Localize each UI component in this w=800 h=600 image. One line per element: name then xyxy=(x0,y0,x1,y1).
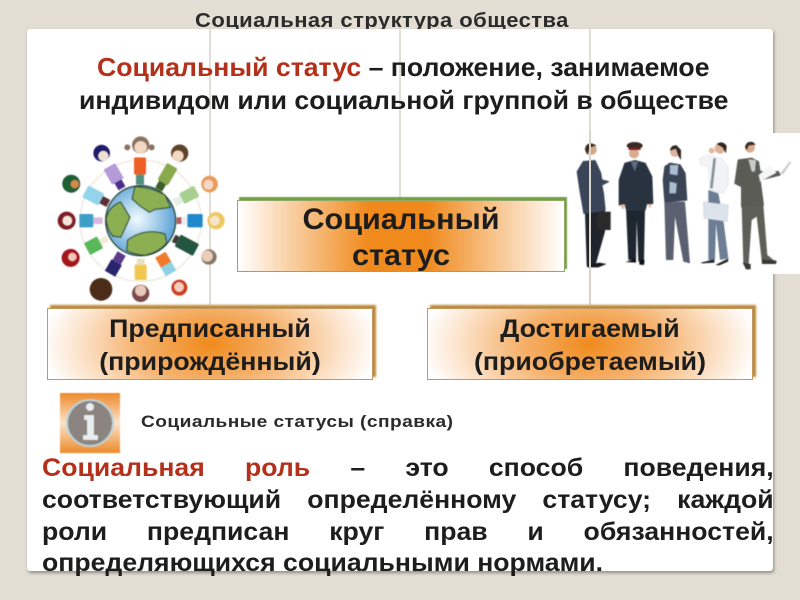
box: ascribed status: Предписанный xyxy=(109,315,311,343)
box: social status: статус xyxy=(352,239,450,272)
definition heading: social status: индивидом или социальной группой в обществе xyxy=(79,85,728,115)
illustration: five professionals xyxy=(576,141,792,270)
guide line over first figure xyxy=(589,130,591,305)
illustration: children around the globe xyxy=(56,136,226,303)
icon: information xyxy=(59,392,121,454)
definition text: social role: роли предписан круг прав и обязанностей, xyxy=(42,518,774,546)
box: social status xyxy=(237,200,565,272)
box: ascribed status xyxy=(47,308,373,380)
box: social status: Социальный xyxy=(302,203,500,236)
box: achieved status: (приобретаемый) xyxy=(474,348,706,376)
illustration: white backing strip for the people xyxy=(770,133,800,274)
box: achieved status xyxy=(427,308,753,380)
page title: Социальная структура общества xyxy=(195,10,569,32)
definition text: social role: определяющихся социальными нормами. xyxy=(42,549,603,577)
box: achieved status: Достигаемый xyxy=(500,315,680,343)
definition text: social role: соответствующий определённому статусу; каждой xyxy=(42,486,774,514)
definition text: social role xyxy=(42,454,774,577)
box: ascribed status: (прирождённый) xyxy=(99,348,321,376)
link: social statuses reference: Социальные статусы (справка) xyxy=(141,412,453,431)
definition heading: social status: Социальный статус – положение, занимаемое xyxy=(97,52,710,82)
definition heading: social status xyxy=(79,52,728,115)
definition text: social role: Социальная роль – это способ поведения, xyxy=(42,454,774,482)
